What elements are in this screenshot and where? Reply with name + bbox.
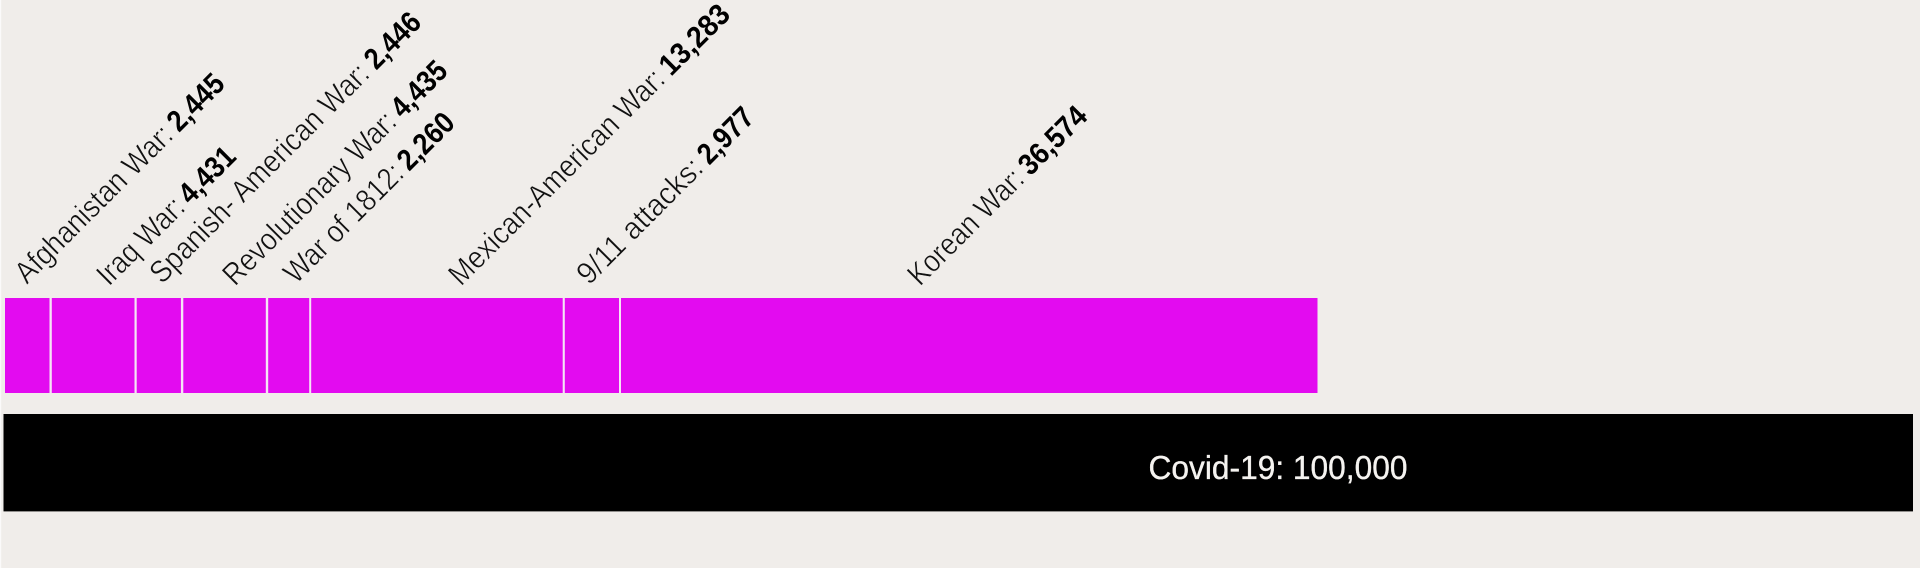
label: 9/11 attacks — [569, 99, 761, 291]
label: War of 1812 — [276, 105, 461, 290]
segment: Iraq War — [52, 298, 134, 393]
label: Spanish-American War: Spanish- American War: — [142, 56, 376, 290]
segment: Spanish-American War — [137, 298, 181, 393]
label: Iraq War — [89, 139, 243, 292]
stacked bar: war deaths — [5, 298, 1318, 393]
segment: Revolutionary War — [183, 298, 266, 393]
label: Korean War — [900, 98, 1094, 292]
label: Mexican-American War: Mexican-American War: — [441, 61, 672, 292]
label: War of 1812: War of 1812: — [276, 156, 411, 290]
label: 9/11 attacks: 9/11 attacks: — [569, 150, 710, 291]
label: War of 1812: 2,260 — [391, 106, 461, 177]
segment: 9/11 attacks — [565, 298, 619, 393]
label: Afghanistan War: Afghanistan War: — [7, 117, 180, 290]
label: Revolutionary War: 4,435 — [384, 54, 454, 124]
segment: Korean War — [621, 298, 1318, 393]
label: Revolutionary War: Revolutionary War: — [215, 104, 403, 292]
label: Afghanistan War: 2,445 — [161, 67, 231, 138]
label: Spanish-American War: 2,446 — [358, 6, 428, 76]
segment: Mexican-American War — [311, 298, 563, 393]
label: 9/11 attacks: 2,977 — [691, 101, 761, 171]
segment: War of 1812 — [268, 298, 309, 393]
segment: Afghanistan War — [5, 298, 50, 393]
label: Iraq War: 4,431 — [172, 140, 243, 211]
label: Covid-19 total: Covid-19: 100,000 — [1148, 449, 1408, 486]
label: Iraq War: Iraq War: — [89, 189, 192, 292]
label: Korean War: Korean War: — [900, 161, 1031, 292]
label: Korean War: 36,574 — [1012, 99, 1094, 182]
bar: Covid-19 — [4, 414, 1913, 511]
